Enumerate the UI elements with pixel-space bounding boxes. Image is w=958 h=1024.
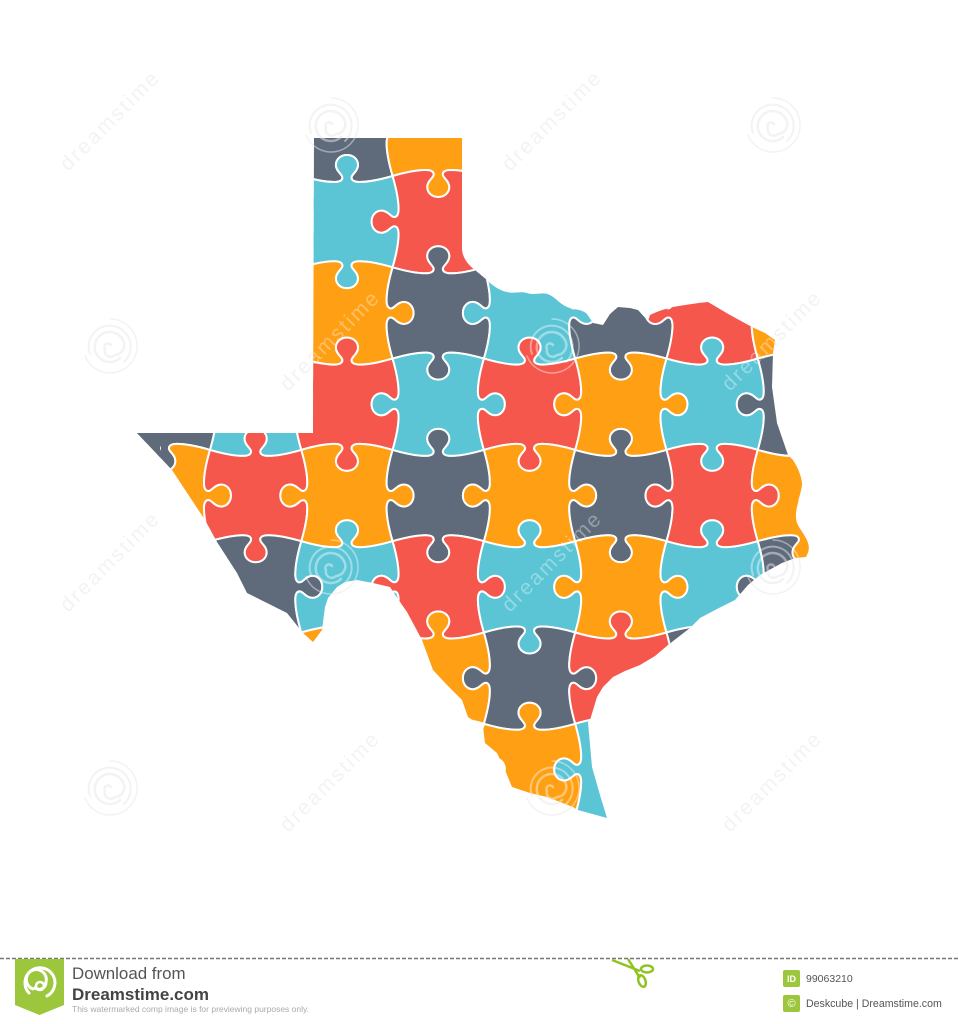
puzzle row: west to east central <box>146 428 809 562</box>
puzzle row: panhandle base and north border <box>313 245 775 379</box>
watermark overlay on map <box>305 138 800 807</box>
watermark: logos and text on white: dreamstime <box>717 287 825 396</box>
image credit: Deskcube | Dreamstime.com <box>806 998 942 1010</box>
icon: id badge <box>783 970 800 987</box>
footer heading: download from: Download from <box>72 964 186 983</box>
icon: id badge: ID <box>787 974 797 984</box>
watermark: logos and text on white: dreamstime <box>717 728 825 837</box>
watermark: logos and text on white: dreamstime <box>497 67 605 176</box>
Texas puzzle map <box>137 138 809 818</box>
icon: copyright badge <box>783 995 800 1012</box>
puzzle row: southern tip <box>483 702 607 818</box>
footer dashed divider <box>0 958 958 960</box>
watermark overlay on map: dreamstime <box>497 508 605 617</box>
icon: scissors <box>612 959 653 988</box>
puzzle row: panhandle top <box>314 138 462 196</box>
puzzle row: panhandle middle <box>314 154 474 288</box>
puzzle row: southwest to gulf <box>215 519 808 652</box>
puzzle row: south <box>302 610 692 729</box>
image id: 99063210 <box>806 973 853 985</box>
footer fine print: This watermarked comp image is for previewing purposes only. <box>72 1004 309 1014</box>
puzzle row: north central <box>137 336 789 470</box>
watermark overlay on map: dreamstime <box>275 287 383 396</box>
watermark: logos and text on white: dreamstime <box>497 508 605 617</box>
watermark: logos and text on white <box>55 67 825 837</box>
watermark: logos and text on white: dreamstime <box>55 67 163 176</box>
watermark: logos and text on white: dreamstime <box>275 287 383 396</box>
watermark overlay on map: dreamstime <box>717 287 825 396</box>
watermark: logos and text on white: dreamstime <box>55 508 163 617</box>
icon: copyright badge: © <box>787 998 796 1010</box>
footer heading: dreamstime: Dreamstime.com <box>72 985 209 1004</box>
footer badge: dreamstime logo <box>15 959 64 1015</box>
edge patches hiding stray knobs <box>137 136 418 475</box>
watermark: logos and text on white: dreamstime <box>275 728 383 837</box>
